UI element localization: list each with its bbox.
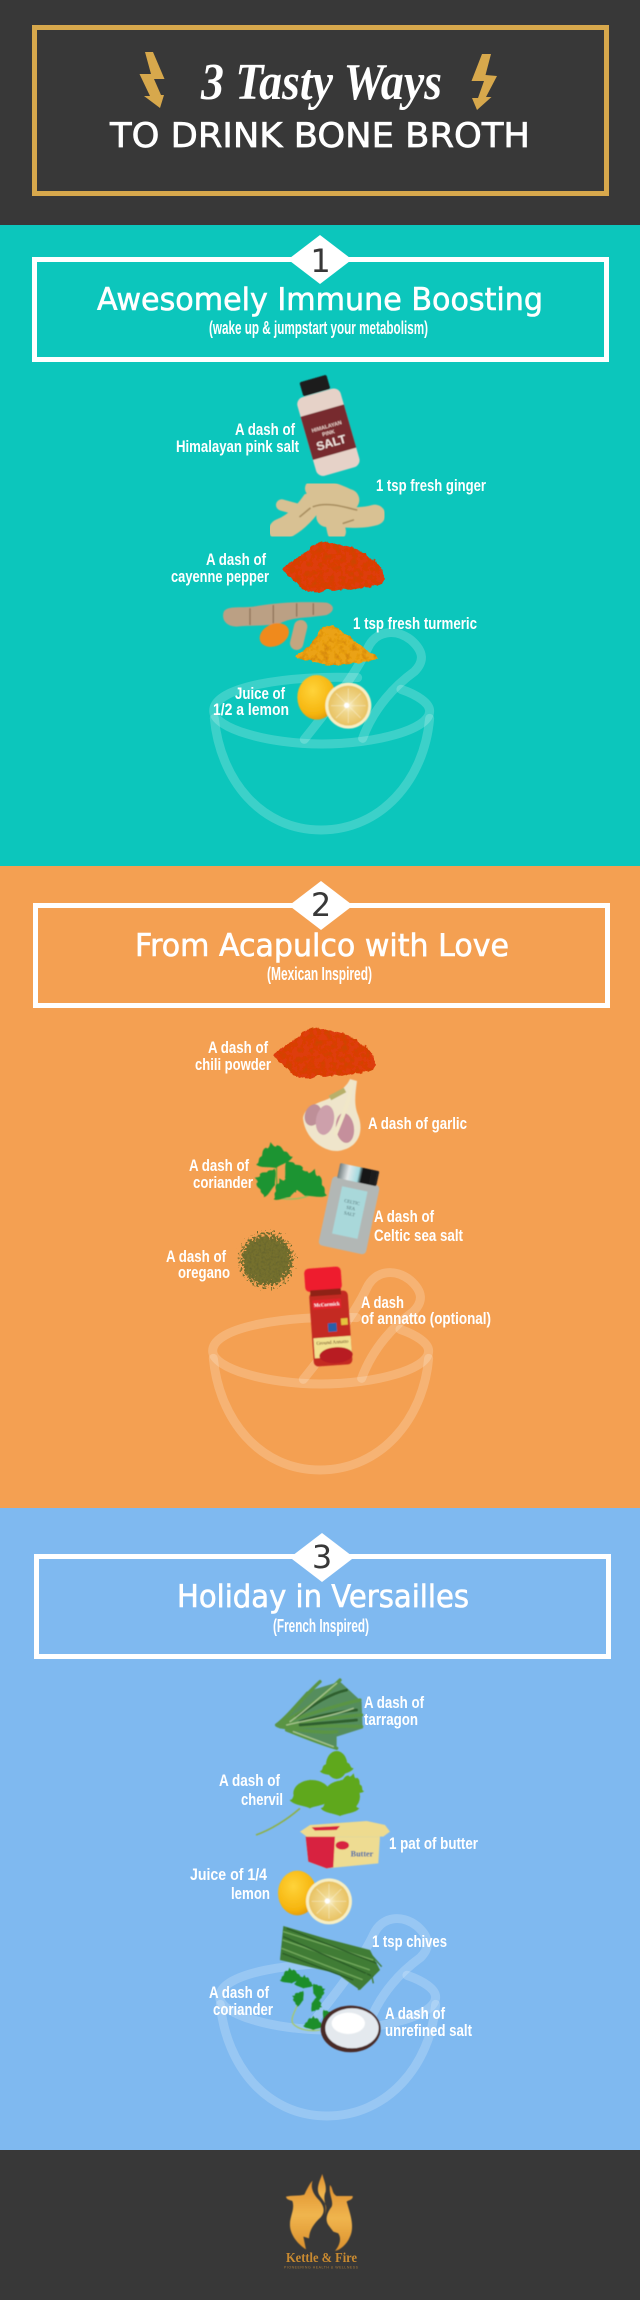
heading frame 3: 3: [312, 1538, 332, 1576]
label: lemon juice: Juice of 1/4: [190, 1866, 268, 1884]
icon: right lightning bolt: [472, 54, 497, 110]
label: annatto: of annatto (optional): [361, 1310, 491, 1328]
gold title frame: [34, 28, 606, 194]
label: celtic sea salt: [374, 1208, 463, 1245]
icon: oregano: [241, 1234, 293, 1286]
footer band: [0, 2150, 640, 2300]
panel: section 1 immune boosting: [0, 225, 640, 866]
label: celtic sea salt: Celtic sea salt: [374, 1227, 463, 1245]
label: coriander: coriander: [193, 1174, 253, 1192]
icon: chives: [280, 1926, 382, 1990]
icon: celtic sea salt jar: SALT: [343, 1211, 355, 1219]
label: celtic sea salt: A dash of: [374, 1208, 434, 1226]
icon: turmeric powder: [295, 626, 378, 665]
title script line: 3 Tasty Ways: [200, 54, 442, 111]
icon: lemon halves: [278, 1871, 352, 1924]
label: unrefined salt: [385, 2005, 472, 2040]
label: tarragon: tarragon: [364, 1711, 418, 1729]
heading frame 2: [36, 881, 608, 1006]
label: lemon juice: [213, 685, 289, 719]
icon: cayenne pepper powder: [283, 543, 384, 592]
label: chervil: [219, 1772, 283, 1809]
label: chervil: chervil: [241, 1791, 283, 1809]
label: chili powder: A dash of: [208, 1039, 268, 1057]
label: lemon juice: [190, 1866, 270, 1903]
icon: celtic sea salt jar: SEA: [346, 1206, 356, 1212]
label: lemon juice: Juice of: [235, 685, 285, 703]
logo: kettle and fire: Kettle & Fire: [286, 2250, 357, 2265]
label: annatto: [361, 1294, 491, 1328]
label: garlic: A dash of garlic: [368, 1115, 467, 1133]
logo: kettle and fire: [284, 2174, 359, 2270]
icon: mortar and pestle: [214, 633, 430, 830]
heading frame 1: (wake up & jumpstart your metabolism): [209, 317, 428, 338]
heading frame 2: From Acapulco with Love: [135, 928, 509, 964]
heading frame 3: [36, 1533, 608, 1656]
icon: butter tub: [300, 1821, 390, 1868]
label: tarragon: A dash of: [364, 1694, 424, 1712]
icon: himalayan salt bottle: SALT: [315, 432, 348, 454]
icon: annatto bottle: [304, 1266, 353, 1367]
icon: left lightning bolt: [140, 52, 164, 108]
heading frame 1: 1: [310, 242, 331, 280]
icon: celtic sea salt jar: [318, 1162, 383, 1255]
label: oregano: oregano: [178, 1264, 230, 1282]
label: turmeric: 1 tsp fresh turmeric: [353, 615, 477, 633]
label: oregano: A dash of: [166, 1248, 226, 1266]
label: cayenne: A dash of: [206, 551, 266, 569]
icon: mortar and pestle: [220, 1919, 436, 2116]
label: butter: 1 pat of butter: [389, 1835, 478, 1853]
icon: salt bowl: [321, 2006, 381, 2052]
icon: himalayan salt bottle: HIMALAYAN: [311, 420, 343, 434]
panel: section 2 acapulco: [0, 866, 640, 1508]
label: chili powder: chili powder: [195, 1056, 271, 1074]
logo: kettle and fire: PIONEERING HEALTH & WELLNESS: [284, 2266, 359, 2270]
icon: lemon: [297, 675, 371, 729]
header band: [0, 0, 640, 225]
icon: tarragon: [277, 1680, 363, 1748]
label: chervil: A dash of: [219, 1772, 280, 1790]
title second line: TO DRINK BONE BROTH: [109, 116, 530, 156]
icon: mortar and pestle: [213, 1273, 429, 1470]
icon: garlic bulb: [302, 1079, 361, 1151]
label: coriander: A dash of: [209, 1984, 269, 2002]
icon: chili powder: [274, 1029, 375, 1078]
label: coriander: [209, 1984, 273, 2019]
heading frame 3: Holiday in Versailles: [177, 1579, 469, 1615]
heading frame 1: Awesomely Immune Boosting: [97, 282, 543, 318]
label: coriander: [189, 1157, 253, 1192]
heading frame 1: [34, 235, 606, 360]
label: ginger: 1 tsp fresh ginger: [376, 477, 486, 495]
label: coriander: A dash of: [189, 1157, 249, 1175]
icon: celtic sea salt jar: CELTIC: [344, 1199, 360, 1207]
icon: fresh turmeric: [223, 602, 333, 651]
label: lemon juice: lemon: [231, 1885, 270, 1903]
icon: himalayan salt bottle: [291, 372, 361, 478]
label: unrefined salt: unrefined salt: [385, 2022, 472, 2040]
heading frame 3: (French Inspired): [273, 1615, 369, 1636]
label: cayenne: cayenne pepper: [171, 568, 269, 586]
label: chili powder: [195, 1039, 271, 1074]
icon: chervil: [256, 1751, 368, 1835]
icon: coriander: [249, 1138, 334, 1205]
heading frame 2: (Mexican Inspired): [267, 963, 372, 984]
icon: coriander: [278, 1966, 339, 2031]
icon: ginger root: [280, 488, 375, 532]
icon: butter tub: Butter: [351, 1848, 373, 1858]
icon: annatto bottle: McCormick: [314, 1302, 340, 1309]
label: chives: 1 tsp chives: [372, 1933, 447, 1951]
icon: annatto bottle: Ground Annatto: [316, 1340, 349, 1347]
label: tarragon: [364, 1694, 424, 1729]
label: unrefined salt: A dash of: [385, 2005, 445, 2023]
heading frame 2: 2: [311, 886, 331, 924]
label: pink salt: A dash of: [235, 421, 295, 439]
label: cayenne: [171, 551, 269, 586]
label: lemon juice: 1/2 a lemon: [213, 701, 289, 719]
label: pink salt: [176, 421, 299, 456]
label: pink salt: Himalayan pink salt: [176, 438, 299, 456]
icon: himalayan salt bottle: PINK: [322, 429, 336, 438]
label: oregano: [166, 1248, 230, 1282]
label: coriander: coriander: [213, 2001, 273, 2019]
panel: section 3 versailles: [0, 1508, 640, 2150]
label: annatto: A dash: [361, 1294, 404, 1312]
